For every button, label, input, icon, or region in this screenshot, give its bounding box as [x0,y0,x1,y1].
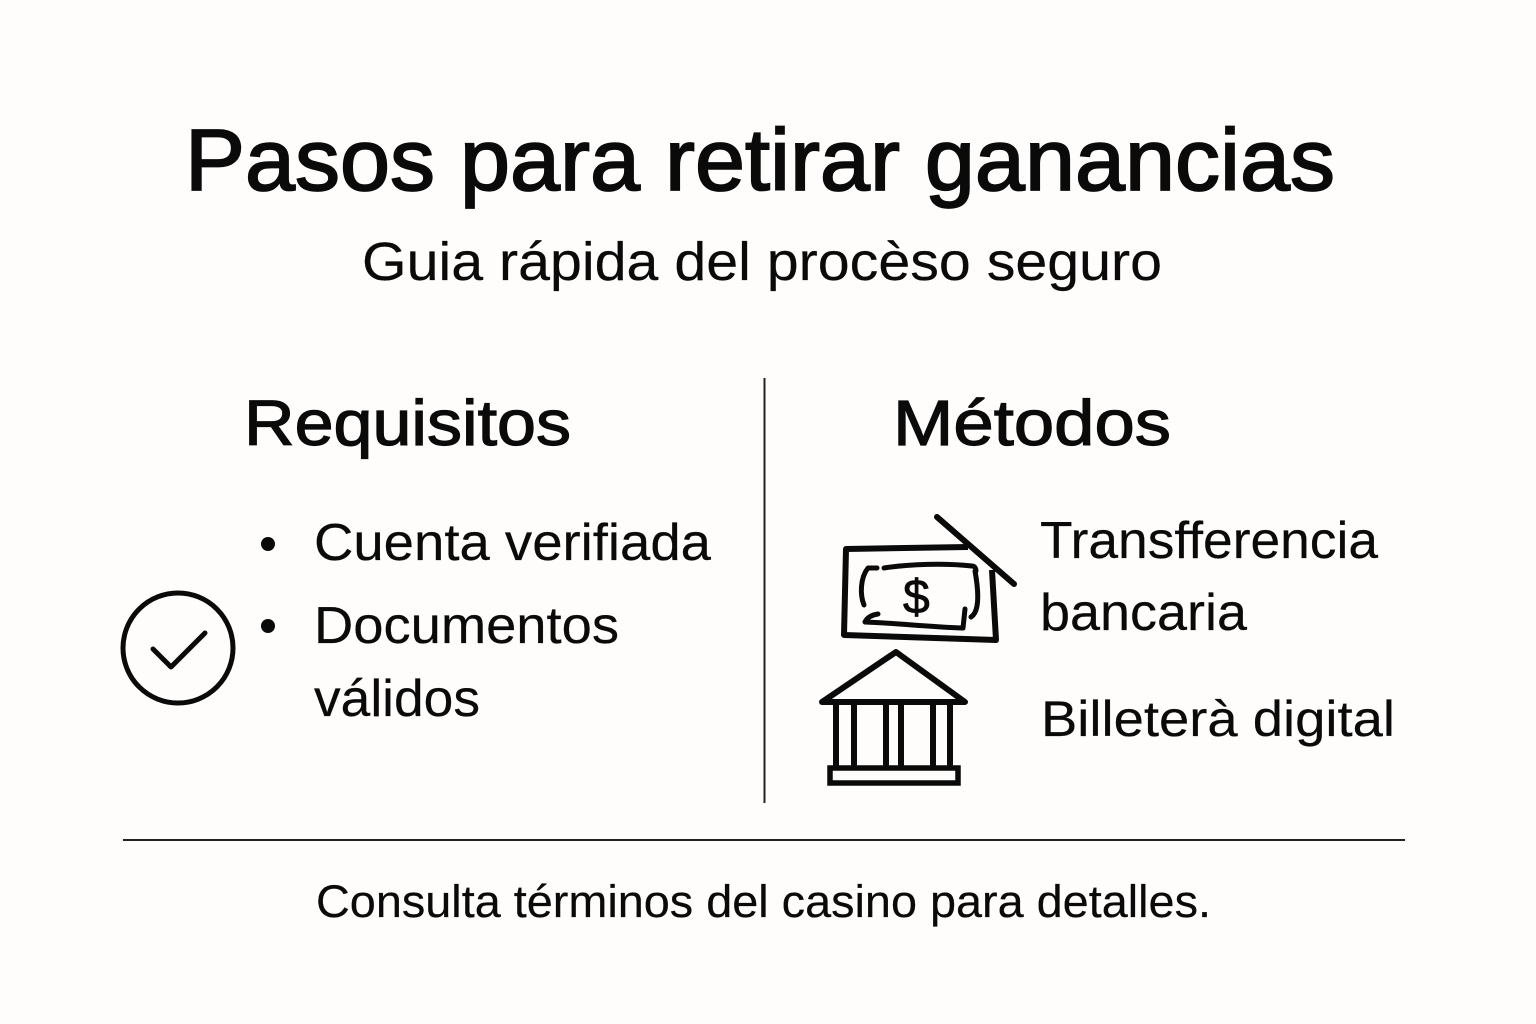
panel: metodos [822,387,1395,783]
bullet list: Documentos [314,597,619,655]
title: Pasos para retirar ganancias [185,112,1335,209]
icon: check circle [123,593,233,703]
method: transferencia: Transfferencia [1040,512,1378,570]
bullet list: válidos [314,670,480,728]
method: transferencia [1040,512,1378,642]
heading: metodos: Métodos [893,387,1171,459]
icon: banknote [844,517,1014,640]
method: transferencia: bancaria [1040,584,1247,642]
panel: requisitos [123,387,711,728]
icon: bank building [822,652,965,783]
method: billetera: Billeterà digital [1041,691,1395,747]
footer note: Consulta términos del casino para detalles. [316,876,1211,927]
bullet list: Cuenta verifiada [314,514,711,572]
heading: requisitos: Requisitos [244,387,571,459]
bullet list [261,514,711,728]
icon: banknote: $ [903,571,930,624]
subtitle: Guia rápida del procèso seguro [362,232,1162,292]
